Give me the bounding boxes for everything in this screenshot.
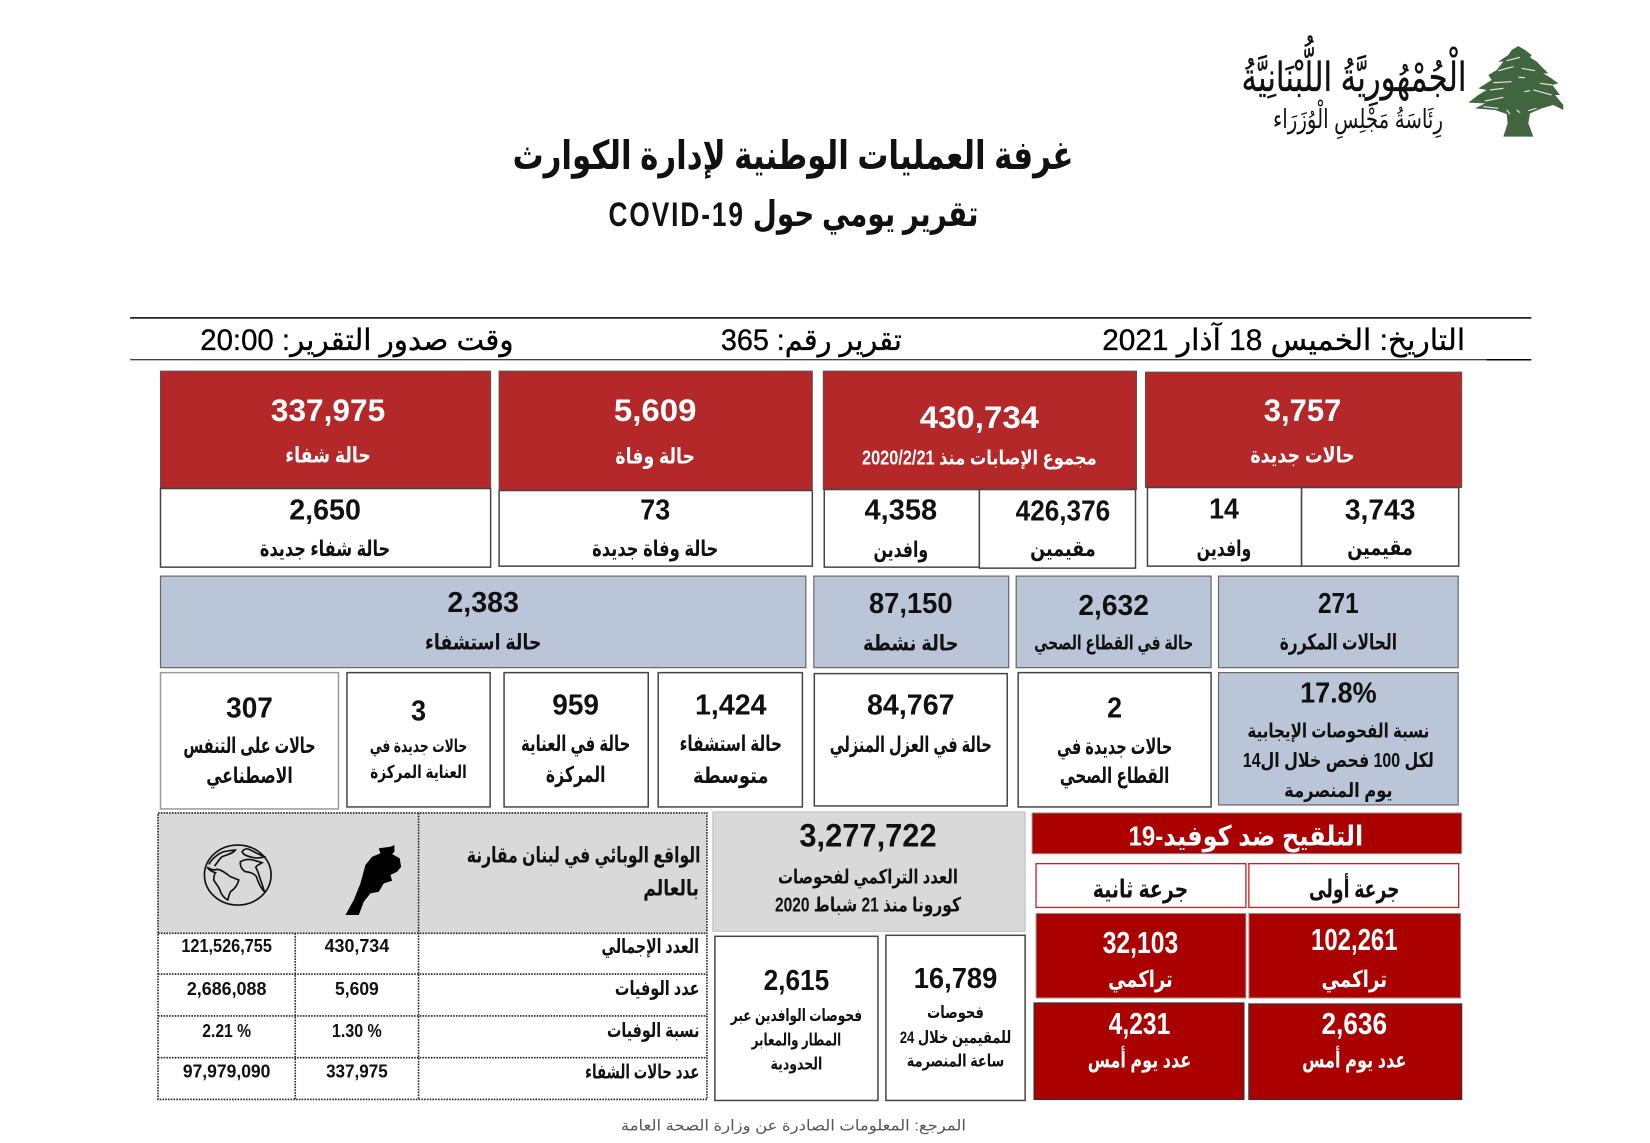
panel: first dose heading [1249, 864, 1459, 907]
value: total arrivals: 4,358 [865, 494, 937, 526]
value: ICU: 959 [552, 689, 599, 721]
heading: Lebanon vs world line 2: بالعالم [643, 875, 699, 901]
panel: cumulative tests [713, 812, 1025, 931]
value: arrivals tests: 2,615 [764, 965, 829, 997]
row: total cases: 121,526,755 [181, 936, 272, 957]
label: second dose yesterday: عدد يوم أمس [1088, 1045, 1191, 1074]
label: moderate line 2: متوسطة [693, 763, 769, 789]
panel: second dose heading [1036, 864, 1246, 907]
panel: active cases [814, 576, 1009, 668]
row: recoveries: 97,979,090 [183, 1062, 270, 1083]
row: deaths: 2,686,088 [187, 979, 266, 1000]
label: cumulative tests line 1: العدد التراكمي لفحوصات [778, 867, 958, 889]
label: total arrivals: وافدين [873, 537, 928, 563]
label: home isolation: حالة في العزل المنزلي [830, 732, 992, 758]
label: arrivals tests line 1: فحوصات الوافدين عبر [730, 1006, 862, 1026]
panel: recovered [161, 371, 491, 567]
label: total residents: مقيمين [1030, 536, 1096, 561]
panel: home isolation [814, 674, 1007, 806]
value: total residents: 426,376 [1016, 495, 1110, 527]
value: new recoveries: 2,650 [289, 494, 361, 526]
label: hospitalised: حالة استشفاء [425, 630, 541, 655]
panel: first dose heading: جرعة أولى [1309, 872, 1400, 904]
label: new recoveries: حالة شفاء جديدة [260, 536, 390, 561]
row: fatality rate: 2.21 % [202, 1021, 251, 1042]
panel: new cases [1145, 372, 1462, 566]
label: arrivals tests line 3: الحدودية [771, 1055, 822, 1075]
icon: globe [204, 845, 271, 905]
panel: second dose yesterday [1034, 1003, 1244, 1099]
value: new health sector: 2 [1107, 692, 1122, 724]
label: new arrivals: وافدين [1197, 536, 1251, 562]
panel: second dose yesterday: 4,231 [1109, 1006, 1170, 1041]
panel: first dose cumulative: 102,261 [1311, 922, 1398, 957]
label: new residents: مقيمين [1347, 535, 1413, 560]
panel: vaccination header: التلقيح ضد كوفيد-19 [1129, 821, 1363, 853]
panel: new ICU cases [347, 673, 490, 807]
label: ventilator line 2: الاصطناعي [206, 763, 293, 789]
panel: moderate cases [658, 673, 802, 807]
label: health sector: حالة في القطاع الصحي [1034, 633, 1193, 655]
row: fatality rate [202, 1020, 699, 1042]
label: first dose cumulative: تراكمي [1321, 966, 1387, 993]
row: fatality rate: نسبة الوفيات [607, 1020, 699, 1042]
label: new ICU line 2: العناية المركزة [370, 762, 467, 783]
value: new ICU: 3 [411, 695, 426, 727]
row: recoveries: عدد حالات الشفاء [585, 1062, 699, 1084]
panel: resident tests [886, 935, 1025, 1100]
panel: second dose cumulative: 32,103 [1103, 925, 1178, 960]
value: resident tests: 16,789 [914, 963, 997, 995]
label: new ICU line 1: حالات جديدة في [370, 736, 467, 757]
panel: arrivals tests [715, 936, 878, 1100]
value: recoveries: 337,975 [271, 392, 385, 428]
value: new deaths: 73 [640, 494, 670, 526]
panel: on ventilator [161, 673, 338, 809]
value: ventilator: 307 [226, 692, 273, 724]
report time: وقت صدور التقرير: 20:00 [200, 324, 514, 357]
panel: first dose yesterday [1249, 1004, 1462, 1099]
report number: تقرير رقم: 365 [721, 324, 902, 358]
panel: deaths [499, 371, 812, 566]
title: غرفة العمليات الوطنية لإدارة الكوارث [513, 134, 1073, 179]
row: total cases: 430,734 [325, 936, 390, 957]
source note: المرجع: المعلومات الصادرة عن وزارة الصحة العامة [621, 1117, 966, 1134]
label: resident tests line 2: للمقيمين خلال 24 [900, 1028, 1011, 1048]
label: total cases: مجموع الإصابات منذ 2020/2/21 [862, 448, 1097, 470]
row: fatality rate: 1.30 % [332, 1021, 382, 1042]
logo: Lebanese cedar tree [1468, 46, 1563, 137]
panel: Lebanon vs world table [158, 813, 707, 1099]
label: positivity line 2: لكل 100 فحص خلال ال14 [1243, 750, 1434, 772]
label: new health sector line 1: حالات جديدة في [1057, 734, 1172, 760]
row: deaths: 5,609 [335, 979, 379, 1000]
label: arrivals tests line 2: المطار والمعابر [751, 1031, 841, 1051]
label: deaths: حالة وفاة [615, 444, 695, 470]
panel: second dose cumulative [1036, 913, 1246, 998]
panel: new health sector cases [1018, 673, 1211, 807]
subtitle: تقرير يومي حول COVID-19 [608, 194, 978, 235]
label: new cases: حالات جديدة [1250, 443, 1355, 468]
panel: first dose yesterday: 2,636 [1321, 1006, 1387, 1041]
row: deaths: عدد الوفيات [615, 978, 699, 1000]
label: new deaths: حالة وفاة جديدة [592, 536, 718, 562]
value: new cases: 3,757 [1264, 392, 1341, 428]
panel: total cases [823, 371, 1137, 568]
icon: Lebanon map [345, 845, 401, 915]
panel: vaccination header [1032, 813, 1462, 854]
label: positivity line 1: نسبة الفحوصات الإيجابية [1247, 720, 1429, 742]
label: recoveries: حالة شفاء [285, 443, 371, 468]
report info bar [130, 318, 1531, 360]
value: positivity: 17.8% [1300, 677, 1377, 709]
value: total cases: 430,734 [920, 399, 1039, 435]
row: recoveries: 337,975 [326, 1062, 388, 1083]
label: first dose yesterday: عدد يوم أمس [1302, 1045, 1406, 1074]
panel: ICU cases [504, 673, 648, 807]
row: recoveries [183, 1062, 699, 1084]
value: active: 87,150 [869, 588, 953, 620]
row: total cases [181, 936, 699, 958]
label: positivity line 3: يوم المنصرمة [1284, 780, 1393, 802]
value: hospitalised: 2,383 [447, 587, 519, 619]
value: moderate: 1,424 [695, 689, 767, 721]
panel: health sector cases [1016, 576, 1211, 668]
panel: first dose cumulative [1249, 913, 1461, 998]
value: repeat cases: 271 [1318, 588, 1359, 620]
value: home isolation: 84,767 [867, 689, 955, 721]
label: cumulative tests line 2: كورونا منذ 21 شباط 2020 [775, 894, 961, 916]
label: second dose cumulative: تراكمي [1108, 966, 1173, 993]
report layout [130, 134, 1531, 1134]
row: deaths [187, 978, 699, 1000]
heading: Lebanon vs world line 1: الواقع الوبائي في لبنان مقارنة [467, 843, 700, 869]
label: ventilator line 1: حالات على التنفس [183, 733, 316, 758]
label: moderate line 1: حالة استشفاء [680, 731, 782, 756]
value: new residents: 3,743 [1345, 494, 1415, 526]
logo: Lebanese Republic calligraphy: الْجُمْهُورِيَّةُ اللُّبْنَانِيَّةُ [1242, 35, 1466, 107]
report date: التاريخ: الخميس 18 آذار 2021 [1102, 322, 1465, 358]
row: total cases: العدد الإجمالي [602, 936, 699, 958]
label: resident tests line 3: ساعة المنصرمة [907, 1052, 1004, 1072]
label: active: حالة نشطة [863, 631, 959, 656]
panel: repeat cases [1219, 576, 1458, 668]
value: cumulative tests: 3,277,722 [799, 817, 937, 854]
value: deaths: 5,609 [614, 392, 696, 428]
label: new health sector line 2: القطاع الصحي [1060, 763, 1169, 789]
value: health sector: 2,632 [1078, 590, 1149, 622]
label: repeat cases: الحالات المكررة [1280, 630, 1397, 655]
logo: presidency of the council of ministers: رِئَاسَةُ مَجْلِسِ الْوُزَرَاء [1273, 99, 1443, 140]
label: ICU line 1: حالة في العناية [521, 731, 630, 757]
panel: second dose heading: جرعة ثانية [1093, 875, 1188, 904]
value: new arrivals: 14 [1209, 493, 1239, 525]
panel: hospitalised [161, 576, 806, 668]
panel: positivity rate [1219, 673, 1458, 805]
label: ICU line 2: المركزة [546, 762, 605, 787]
logo: Lebanese Republic calligraphy [1242, 35, 1466, 140]
label: resident tests line 1: فحوصات [927, 1003, 984, 1023]
